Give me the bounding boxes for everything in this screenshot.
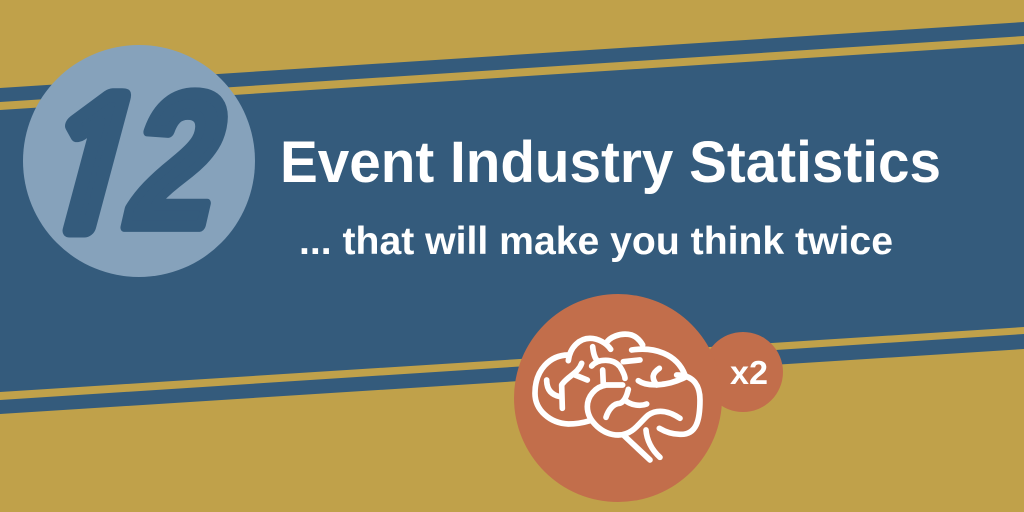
- badge: x2: [703, 332, 783, 412]
- badge: number 12: 1: [14, 81, 169, 257]
- title: Event Industry Statistics: [280, 130, 941, 195]
- badge: number 12: [14, 45, 255, 277]
- badge: x2: x2: [730, 354, 768, 391]
- subtitle: ... that will make you think twice: [299, 220, 893, 263]
- badge: number 12: 2: [111, 54, 247, 267]
- blue diagonal band: [0, 22, 1024, 414]
- brain circle: [514, 294, 722, 502]
- icon: brain: [535, 334, 700, 460]
